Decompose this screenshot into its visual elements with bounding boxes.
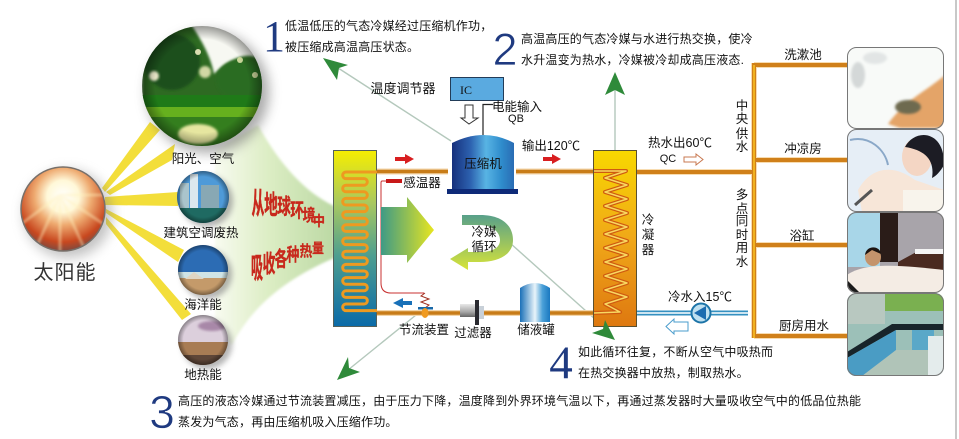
number 4: 4 bbox=[549, 337, 573, 389]
label: refrigerant cycle: 冷媒 bbox=[471, 225, 497, 239]
expansion device bbox=[399, 293, 449, 337]
heading: absorb heat from the environment: 地 bbox=[264, 191, 278, 220]
heading: absorb heat from the environment: 各 bbox=[275, 247, 287, 271]
photo: shower room bbox=[847, 129, 944, 212]
heading: absorb heat from the environment: 收 bbox=[263, 251, 275, 278]
step 2 text: 高温高压的气态冷媒与水进行热交换，使冷 bbox=[521, 31, 753, 46]
green arrowhead 4 bbox=[592, 320, 615, 340]
evaporator coil bbox=[343, 172, 377, 311]
refrigerant cycle arrow bbox=[450, 215, 513, 270]
heading: absorb heat from the environment: 吸 bbox=[251, 252, 263, 285]
step 1 text: 低温低压的气态冷媒经过压缩机作功， bbox=[285, 18, 492, 33]
label: bathtub: 浴缸 bbox=[789, 228, 815, 243]
heading: absorb heat from the environment bbox=[251, 187, 325, 285]
label: cold water in: 冷水入15℃ bbox=[668, 290, 732, 304]
liquid receiver tank: 储液罐 bbox=[517, 322, 555, 337]
photo: trees and lawn bbox=[140, 26, 265, 148]
photo: buildings bbox=[177, 171, 229, 223]
source: geothermal energy bbox=[177, 315, 232, 382]
icon: sun sphere bbox=[20, 167, 105, 252]
green arrowhead 1 bbox=[323, 58, 348, 80]
refrigerant pipes bbox=[377, 172, 594, 313]
label: condenser bbox=[642, 213, 655, 257]
heading: absorb heat from the environment: 从 bbox=[252, 187, 264, 221]
number 3: 3 bbox=[149, 386, 175, 438]
green arrowhead 2 bbox=[605, 72, 625, 95]
label: multi-point simultaneous use: 多 bbox=[736, 188, 748, 202]
label: refrigerant cycle: 循环 bbox=[471, 240, 497, 254]
heading: absorb heat from the environment: 热 bbox=[300, 242, 312, 259]
heading: absorb heat from the environment: 环 bbox=[290, 200, 304, 222]
number 2: 2 bbox=[492, 24, 518, 75]
label: 建筑空调废热 bbox=[163, 225, 239, 240]
label: refrigerant cycle bbox=[471, 225, 497, 254]
step 3 text: 蒸发为气态，再由压缩机吸入压缩作功。 bbox=[178, 414, 398, 429]
compressor bbox=[447, 135, 518, 194]
photo: bathtub bbox=[847, 212, 944, 293]
step 3 description bbox=[149, 386, 861, 438]
cold water pipe bbox=[637, 310, 748, 316]
heading: absorb heat from the environment: 量 bbox=[312, 240, 324, 256]
label: power input: QB bbox=[508, 113, 524, 125]
step 2 text bbox=[521, 31, 753, 67]
photo: kitchen bbox=[847, 293, 944, 376]
big heat gradient arrow bbox=[381, 197, 434, 263]
label: multi-point simultaneous use: 用 bbox=[736, 241, 748, 255]
label: central water supply: 中 bbox=[736, 98, 748, 113]
heading: absorb heat from the environment: 境 bbox=[303, 205, 316, 225]
panel: evaporator bbox=[334, 150, 377, 326]
label: central water supply: 水 bbox=[736, 140, 749, 154]
label: 海洋能 bbox=[184, 297, 222, 312]
label: wash basin: 洗漱池 bbox=[784, 48, 822, 62]
water pump bbox=[692, 304, 710, 322]
compressor: 压缩机 bbox=[464, 156, 502, 171]
label: solar energy: 太阳能 bbox=[34, 261, 96, 284]
photo: geothermal landscape bbox=[177, 315, 229, 366]
condenser coil bbox=[594, 171, 627, 313]
label: central water supply: 央 bbox=[736, 112, 749, 126]
temperature sensor: 感温器 bbox=[403, 175, 441, 190]
hot water pipe network bbox=[637, 63, 847, 338]
label: power input bbox=[492, 99, 542, 125]
IC controller box bbox=[450, 78, 504, 100]
label: central water supply: 供 bbox=[736, 127, 748, 141]
callout arrow lines bbox=[335, 66, 615, 370]
filter bbox=[454, 300, 492, 340]
label: central water supply bbox=[736, 98, 749, 154]
heading: absorb heat from the environment: 球 bbox=[277, 195, 291, 219]
temperature sensor bbox=[381, 175, 441, 293]
yellow energy beams bbox=[102, 122, 191, 320]
green heat absorption fan bbox=[215, 125, 334, 345]
step 1 text bbox=[285, 18, 492, 54]
hollow arrow: hot water out bbox=[684, 154, 703, 165]
label: multi-point simultaneous use: 水 bbox=[736, 255, 749, 269]
step 1 text: 被压缩成高温高压状态。 bbox=[285, 39, 419, 54]
label: multi-point simultaneous use bbox=[736, 188, 749, 269]
hollow arrow: control signal bbox=[461, 105, 478, 124]
power input line bbox=[483, 104, 493, 135]
label: 地热能 bbox=[184, 368, 222, 382]
blue flow arrow bbox=[393, 298, 412, 308]
step 4 text bbox=[578, 344, 773, 380]
photo: beach bbox=[177, 245, 229, 296]
label: power input: 电能输入 bbox=[492, 99, 542, 114]
source: building air conditioning waste heat bbox=[163, 171, 239, 240]
label: hot water out: 热水出60℃ bbox=[648, 136, 712, 150]
step 4 text: 如此循环往复，不断从空气中吸热而 bbox=[578, 344, 773, 359]
photo: wash basin bbox=[847, 47, 945, 129]
step 3 text: 高压的液态冷媒通过节流装置减压，由于压力下降，温度降到外界环境气温以下，再通过蒸发器时大量吸收空气中的低品位热能 bbox=[178, 393, 861, 408]
red watermark smear bbox=[402, 402, 572, 406]
label: shower room: 冲凉房 bbox=[784, 141, 822, 156]
label: condenser: 器 bbox=[642, 243, 655, 257]
heading: absorb heat from the environment: 种 bbox=[287, 245, 299, 266]
step 2 description bbox=[492, 24, 753, 75]
red flow arrow left bbox=[395, 154, 414, 164]
label: 阳光、空气 bbox=[172, 151, 235, 166]
liquid receiver tank bbox=[517, 283, 555, 337]
step 2 text: 水升温变为热水，冷媒被冷却成高压液态. bbox=[521, 52, 744, 67]
expansion device: 节流装置 bbox=[399, 323, 449, 337]
label: multi-point simultaneous use: 时 bbox=[736, 228, 749, 242]
green arrowhead 3 bbox=[337, 357, 360, 380]
step 4 description bbox=[549, 337, 773, 389]
label: hot water out: QC bbox=[660, 153, 676, 165]
filter: 过滤器 bbox=[454, 326, 492, 340]
step 4 text: 在热交换器中放热，制取热水。 bbox=[578, 365, 749, 380]
source: sunlight and air bbox=[140, 26, 269, 166]
label: output temperature: 输出120℃ bbox=[522, 138, 580, 153]
page edge line bbox=[955, 0, 957, 439]
label: hot water out bbox=[648, 136, 712, 165]
panel: condenser bbox=[594, 150, 655, 326]
step 3 text bbox=[178, 393, 861, 429]
number 1: 1 bbox=[263, 12, 285, 61]
source: ocean energy bbox=[177, 245, 232, 312]
label: condenser: 凝 bbox=[642, 227, 655, 242]
solar energy source bbox=[20, 167, 112, 284]
label: temperature regulator: 温度调节器 bbox=[370, 81, 436, 96]
heading: absorb heat from the environment: 中 bbox=[313, 212, 325, 229]
label: multi-point simultaneous use: 同 bbox=[736, 214, 748, 228]
label: kitchen water: 厨房用水 bbox=[779, 318, 829, 333]
label: multi-point simultaneous use: 点 bbox=[736, 202, 748, 216]
label: condenser: 冷 bbox=[642, 213, 654, 227]
red flow arrow right bbox=[543, 154, 561, 164]
hollow arrow: cold water in bbox=[666, 319, 688, 334]
step 1 description bbox=[263, 12, 492, 61]
IC controller box: IC bbox=[460, 83, 472, 97]
